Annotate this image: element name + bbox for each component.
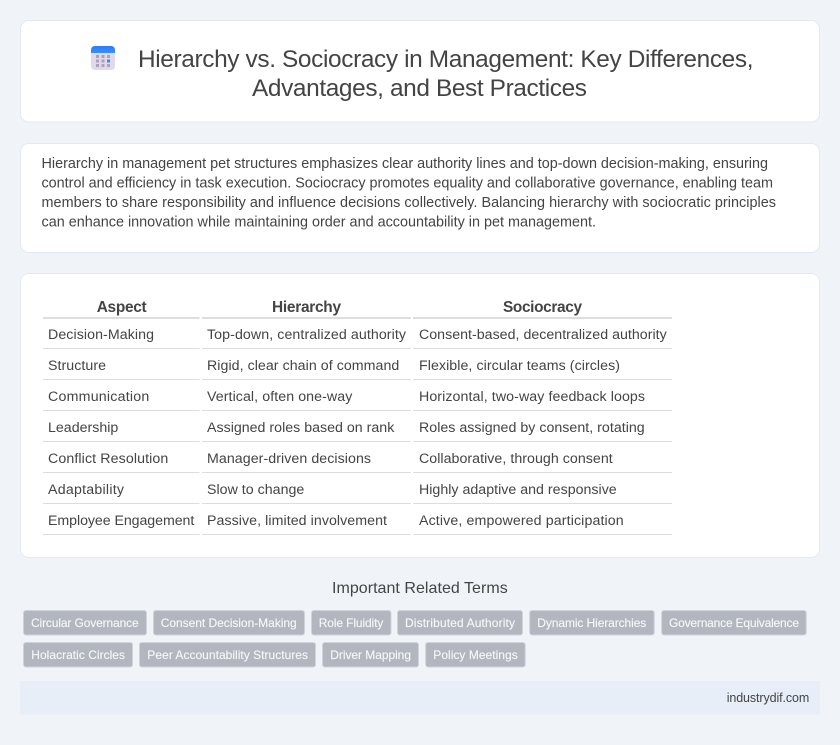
row: conflict resolution: Collaborative, through consent bbox=[419, 451, 613, 467]
chip: distributed authority bbox=[398, 610, 522, 635]
text block: introduction: can enhance innovation while maintaining order and accountability in pet management. bbox=[42, 214, 596, 230]
text block: introduction: members to share responsibility and influence decisions collectively. Balancing hierarchy with sociocratic principles bbox=[42, 195, 776, 211]
row: conflict resolution bbox=[43, 451, 672, 473]
title bbox=[138, 46, 754, 102]
row: employee engagement bbox=[43, 513, 672, 535]
row: decision-making: Consent-based, decentralized authority bbox=[419, 327, 668, 343]
panel: comparison table bbox=[20, 274, 820, 558]
icon: calendar bbox=[91, 46, 115, 70]
panel: header bbox=[20, 20, 820, 122]
row: leadership bbox=[43, 420, 672, 442]
chip: driver mapping: Driver Mapping bbox=[330, 648, 411, 662]
heading: important related terms: Important Related Terms bbox=[332, 580, 508, 597]
footer bbox=[20, 681, 820, 714]
row: communication bbox=[43, 389, 672, 411]
table header: Sociocracy bbox=[503, 299, 582, 316]
table header: Aspect bbox=[97, 299, 147, 316]
text block: introduction: Hierarchy in management pet structures emphasizes clear authority lines and top-down decision-making, ensuring bbox=[42, 156, 768, 172]
chip: governance equivalence bbox=[662, 610, 806, 635]
chip: governance equivalence: Governance Equivalence bbox=[669, 616, 799, 630]
chip: policy meetings: Policy Meetings bbox=[433, 648, 518, 662]
row: adaptability: Highly adaptive and responsive bbox=[419, 482, 617, 498]
footer: industrydif.com bbox=[727, 691, 809, 705]
row: structure bbox=[43, 358, 672, 380]
title: Hierarchy vs. Sociocracy in Management: Key Differences, bbox=[138, 46, 754, 73]
row: communication: Vertical, often one-way bbox=[207, 389, 353, 405]
chip: circular governance: Circular Governance bbox=[31, 616, 139, 630]
row: decision-making bbox=[43, 327, 672, 349]
row: decision-making: Decision-Making bbox=[48, 327, 154, 343]
row: employee engagement: Employee Engagement bbox=[48, 513, 194, 529]
row: adaptability bbox=[43, 482, 672, 504]
chip: peer accountability structures bbox=[140, 642, 316, 667]
text block: introduction bbox=[42, 156, 776, 230]
row: decision-making: Top-down, centralized authority bbox=[207, 327, 407, 343]
title: Advantages, and Best Practices bbox=[252, 75, 587, 102]
row: communication: Communication bbox=[48, 389, 149, 405]
row: leadership: Assigned roles based on rank bbox=[207, 420, 395, 436]
chip: role fluidity: Role Fluidity bbox=[319, 616, 383, 630]
panel: introduction bbox=[20, 144, 820, 252]
row: leadership: Roles assigned by consent, rotating bbox=[419, 420, 645, 436]
row: communication: Horizontal, two-way feedback loops bbox=[419, 389, 645, 405]
table header: Hierarchy bbox=[272, 299, 341, 316]
chip: policy meetings bbox=[426, 642, 525, 667]
chip: dynamic hierarchies: Dynamic Hierarchies bbox=[537, 616, 646, 630]
text block: introduction: control and efficiency in task execution. Sociocracy promotes equality and collaborative governance, enabling team bbox=[42, 176, 773, 192]
row: conflict resolution: Conflict Resolution bbox=[48, 451, 168, 467]
table header bbox=[43, 299, 672, 319]
chip: role fluidity bbox=[312, 610, 391, 635]
chip: consent decision-making: Consent Decision-Making bbox=[161, 616, 297, 630]
row: leadership: Leadership bbox=[48, 420, 118, 436]
panel: related term chips bbox=[24, 610, 806, 667]
chip: holacratic circles: Holacratic Circles bbox=[31, 648, 125, 662]
row: employee engagement: Passive, limited involvement bbox=[207, 513, 387, 529]
row: employee engagement: Active, empowered participation bbox=[419, 513, 624, 529]
chip: dynamic hierarchies bbox=[530, 610, 654, 635]
row: structure: Flexible, circular teams (circles) bbox=[419, 358, 620, 374]
chip: driver mapping bbox=[322, 642, 418, 667]
row: adaptability: Slow to change bbox=[207, 482, 304, 498]
row: adaptability: Adaptability bbox=[48, 482, 125, 498]
chip: circular governance bbox=[24, 610, 146, 635]
row: conflict resolution: Manager-driven decisions bbox=[207, 451, 371, 467]
row: structure: Rigid, clear chain of command bbox=[207, 358, 399, 374]
chip: peer accountability structures: Peer Accountability Structures bbox=[147, 648, 308, 662]
chip: distributed authority: Distributed Authority bbox=[405, 616, 515, 630]
chip: consent decision-making bbox=[154, 610, 304, 635]
chip: holacratic circles bbox=[24, 642, 132, 667]
row: structure: Structure bbox=[48, 358, 106, 374]
